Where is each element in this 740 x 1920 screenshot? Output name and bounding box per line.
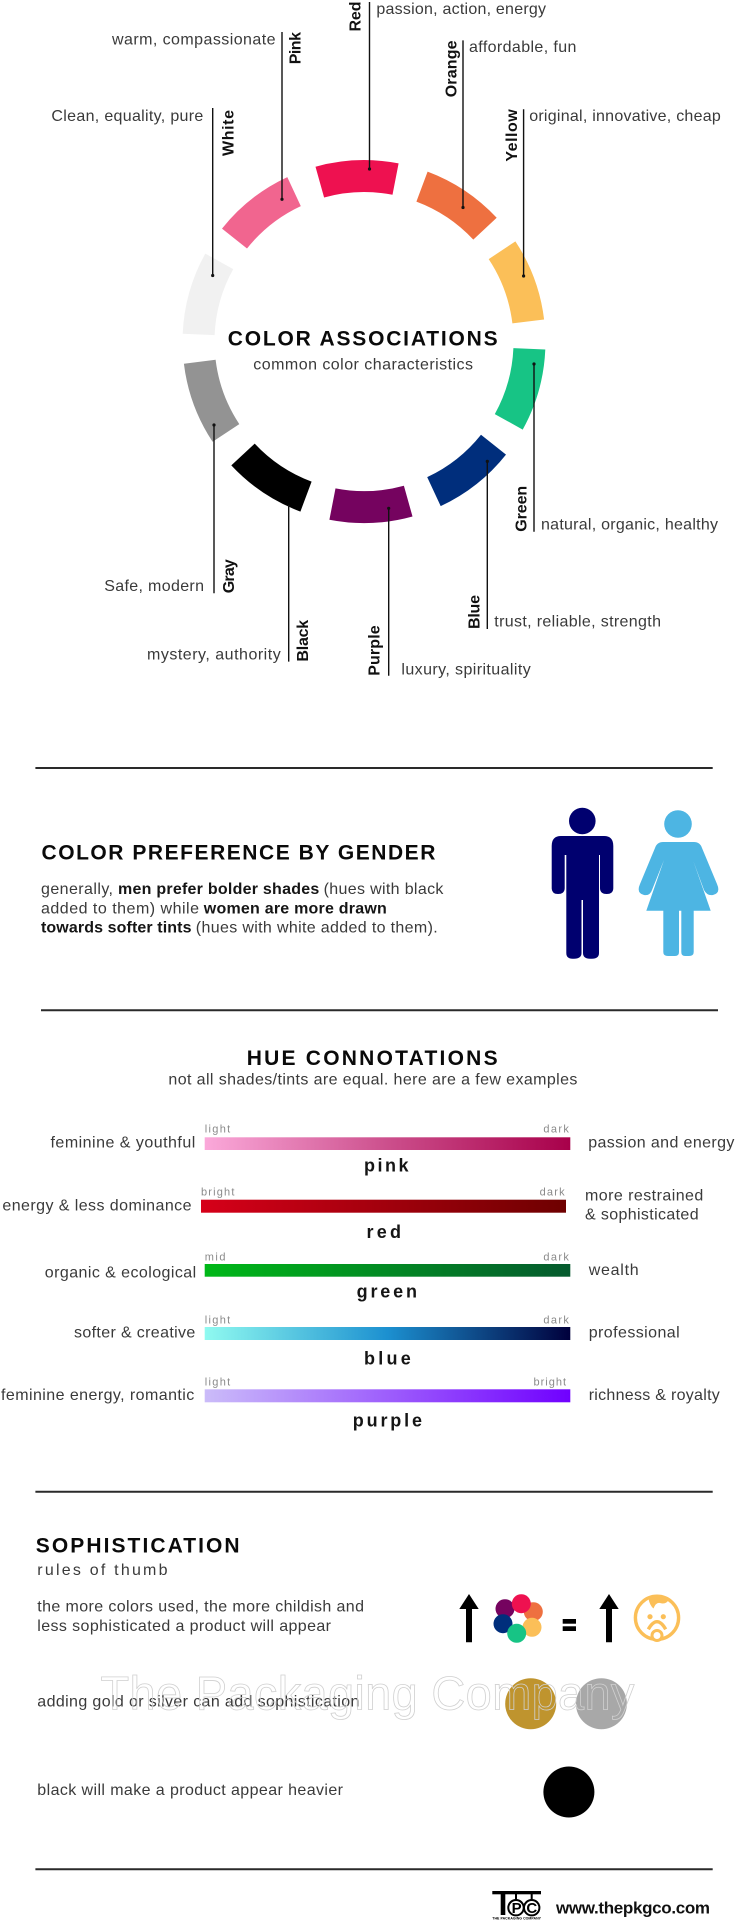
gradient row: red: red [366,1222,401,1242]
callout: yellow [504,108,721,278]
gradient row: blue: blue [364,1348,411,1368]
icon: color cluster [494,1594,543,1643]
gradient row: green: mid [205,1252,226,1264]
callout: blue: Blue [467,595,484,629]
icon: silver circle [576,1678,627,1729]
callout: green: Green [513,486,530,532]
icon: black circle [543,1766,594,1818]
footer url: www.thepkgco.com [555,1898,710,1917]
icon: man [552,808,613,959]
text block: gold or silver rule: adding gold or silver can add sophistication [37,1694,359,1711]
callout: red: passion, action, energy [376,1,546,18]
text block: gender preference description: added to them) while [41,900,199,917]
ring segment: pink [222,177,301,248]
ring segment: red [316,160,399,198]
watermark: the packaging company: The Packaging Company [100,1666,635,1719]
callout: pink: warm, compassionate [111,32,276,48]
gradient row: green [45,1252,639,1302]
panel: color preference by gender [41,808,718,959]
gradient row: pink: feminine & youthful [50,1135,195,1152]
callout: white [51,108,238,277]
gradient row: pink: passion and energy [588,1135,734,1152]
gradient row: blue [74,1314,680,1368]
callout: purple: luxury, spirituality [401,662,531,678]
gradient row: pink: pink [364,1155,409,1175]
text block: gender preference description: towards softer tints [41,920,192,937]
subtitle: hue connotations: not all shades/tints are equal. here are a few examples [168,1071,577,1088]
gradient row: red: bright [201,1187,234,1199]
text block: gender preference description: (hues with white added to them). [196,920,438,937]
ring segment: purple [329,486,412,523]
gradient row: purple: bright [534,1376,566,1388]
text block: gender preference description: women are more drawn [203,900,387,917]
gradient row: blue: dark [543,1314,569,1326]
callout: gray: Safe, modern [104,578,204,595]
gradient row: red: & sophisticated [585,1207,699,1224]
text block: more colors rule: the more colors used, the more childish and [37,1599,364,1616]
text block: gender preference description: men prefer bolder shades [118,881,319,898]
callout: green [513,362,718,533]
gradient row: red: energy & less dominance [2,1198,192,1215]
callout: blue [467,460,661,631]
callout: white: White [220,110,238,156]
gradient row: red: dark [540,1187,565,1199]
gradient row: pink [50,1123,734,1175]
callout: orange: Orange [444,40,461,97]
gradient row: blue: professional [589,1325,680,1342]
icon: woman [639,810,718,956]
ring segment: green [495,348,545,430]
ring segment: blue [427,435,506,506]
ring segment: orange [416,172,497,240]
title: color associations: COLOR ASSOCIATIONS [228,327,498,350]
ring segment: yellow [489,241,544,323]
panel: color associations wheel [51,1,721,679]
callout: white: Clean, equality, pure [51,108,203,125]
gradient row: pink: light [205,1123,230,1135]
text block: black rule: black will make a product appear heavier [37,1782,344,1799]
gradient row: green: wealth [588,1262,639,1279]
callout: green: natural, organic, healthy [541,516,718,533]
subtitle: rules of thumb: rules of thumb [37,1562,168,1579]
gradient row: purple [1,1376,720,1431]
callout: red: Red [347,2,364,32]
gradient row: purple: light [205,1376,230,1388]
callout: orange: affordable, fun [469,39,576,56]
gradient row: blue: softer & creative [74,1325,195,1342]
panel: sophistication [36,1535,679,1818]
callout: purple: Purple [367,625,384,676]
ring segment: gray [184,360,239,442]
icon: baby face [635,1596,679,1640]
text block: more colors rule: less sophisticated a product will appear [37,1618,332,1635]
callout: black: mystery, authority [147,646,281,663]
callout: pink [111,32,304,201]
gradient row: blue: light [205,1314,230,1326]
heading: hue connotations: HUE CONNOTATIONS [247,1047,498,1070]
heading: color preference by gender: COLOR PREFERENCE BY GENDER [42,841,435,864]
gradient row: purple: feminine energy, romantic [1,1387,194,1404]
gradient row: pink: dark [543,1123,569,1135]
callout: yellow: original, innovative, cheap [529,108,721,125]
callout: yellow: Yellow [504,109,521,162]
text block: gender preference description [41,881,444,937]
callout: black [147,505,312,663]
callout: gray: Gray [221,559,238,593]
callout: gray [104,423,238,595]
heading: sophistication: SOPHISTICATION [36,1535,240,1558]
callout: orange [444,39,576,209]
panel: hue connotations [1,1047,734,1431]
icon: up arrow [459,1594,479,1642]
text block: gender preference description: (hues with black [324,881,444,898]
gradient row: green: dark [543,1252,569,1264]
callout: blue: trust, reliable, strength [494,614,661,631]
gradient row: purple: richness & royalty [589,1387,720,1404]
text block: more colors rule [37,1599,364,1635]
gradient row: green: organic & ecological [45,1265,196,1282]
callout: red [347,1,546,171]
callout: pink: Pink [288,32,304,64]
gradient row: red: more restrained [585,1187,703,1204]
footer logo: TPC: P [512,1900,522,1917]
gradient row: green: green [357,1282,417,1302]
icon: gold circle [505,1678,556,1729]
gradient row: purple: purple [353,1411,422,1431]
text block: gender preference description: generally, [41,881,113,898]
footer logo: TPC [492,1891,542,1920]
icon: equals sign [563,1619,576,1631]
ring segment: white [183,254,233,335]
subtitle: common color characteristics: common color characteristics [253,357,473,374]
ring segment: black [231,444,312,512]
callout: black: Black [295,620,312,662]
callout: purple [367,507,531,678]
footer logo: TPC: C [526,1900,537,1917]
icon: up arrow [599,1594,619,1642]
gradient row: red [2,1187,703,1242]
